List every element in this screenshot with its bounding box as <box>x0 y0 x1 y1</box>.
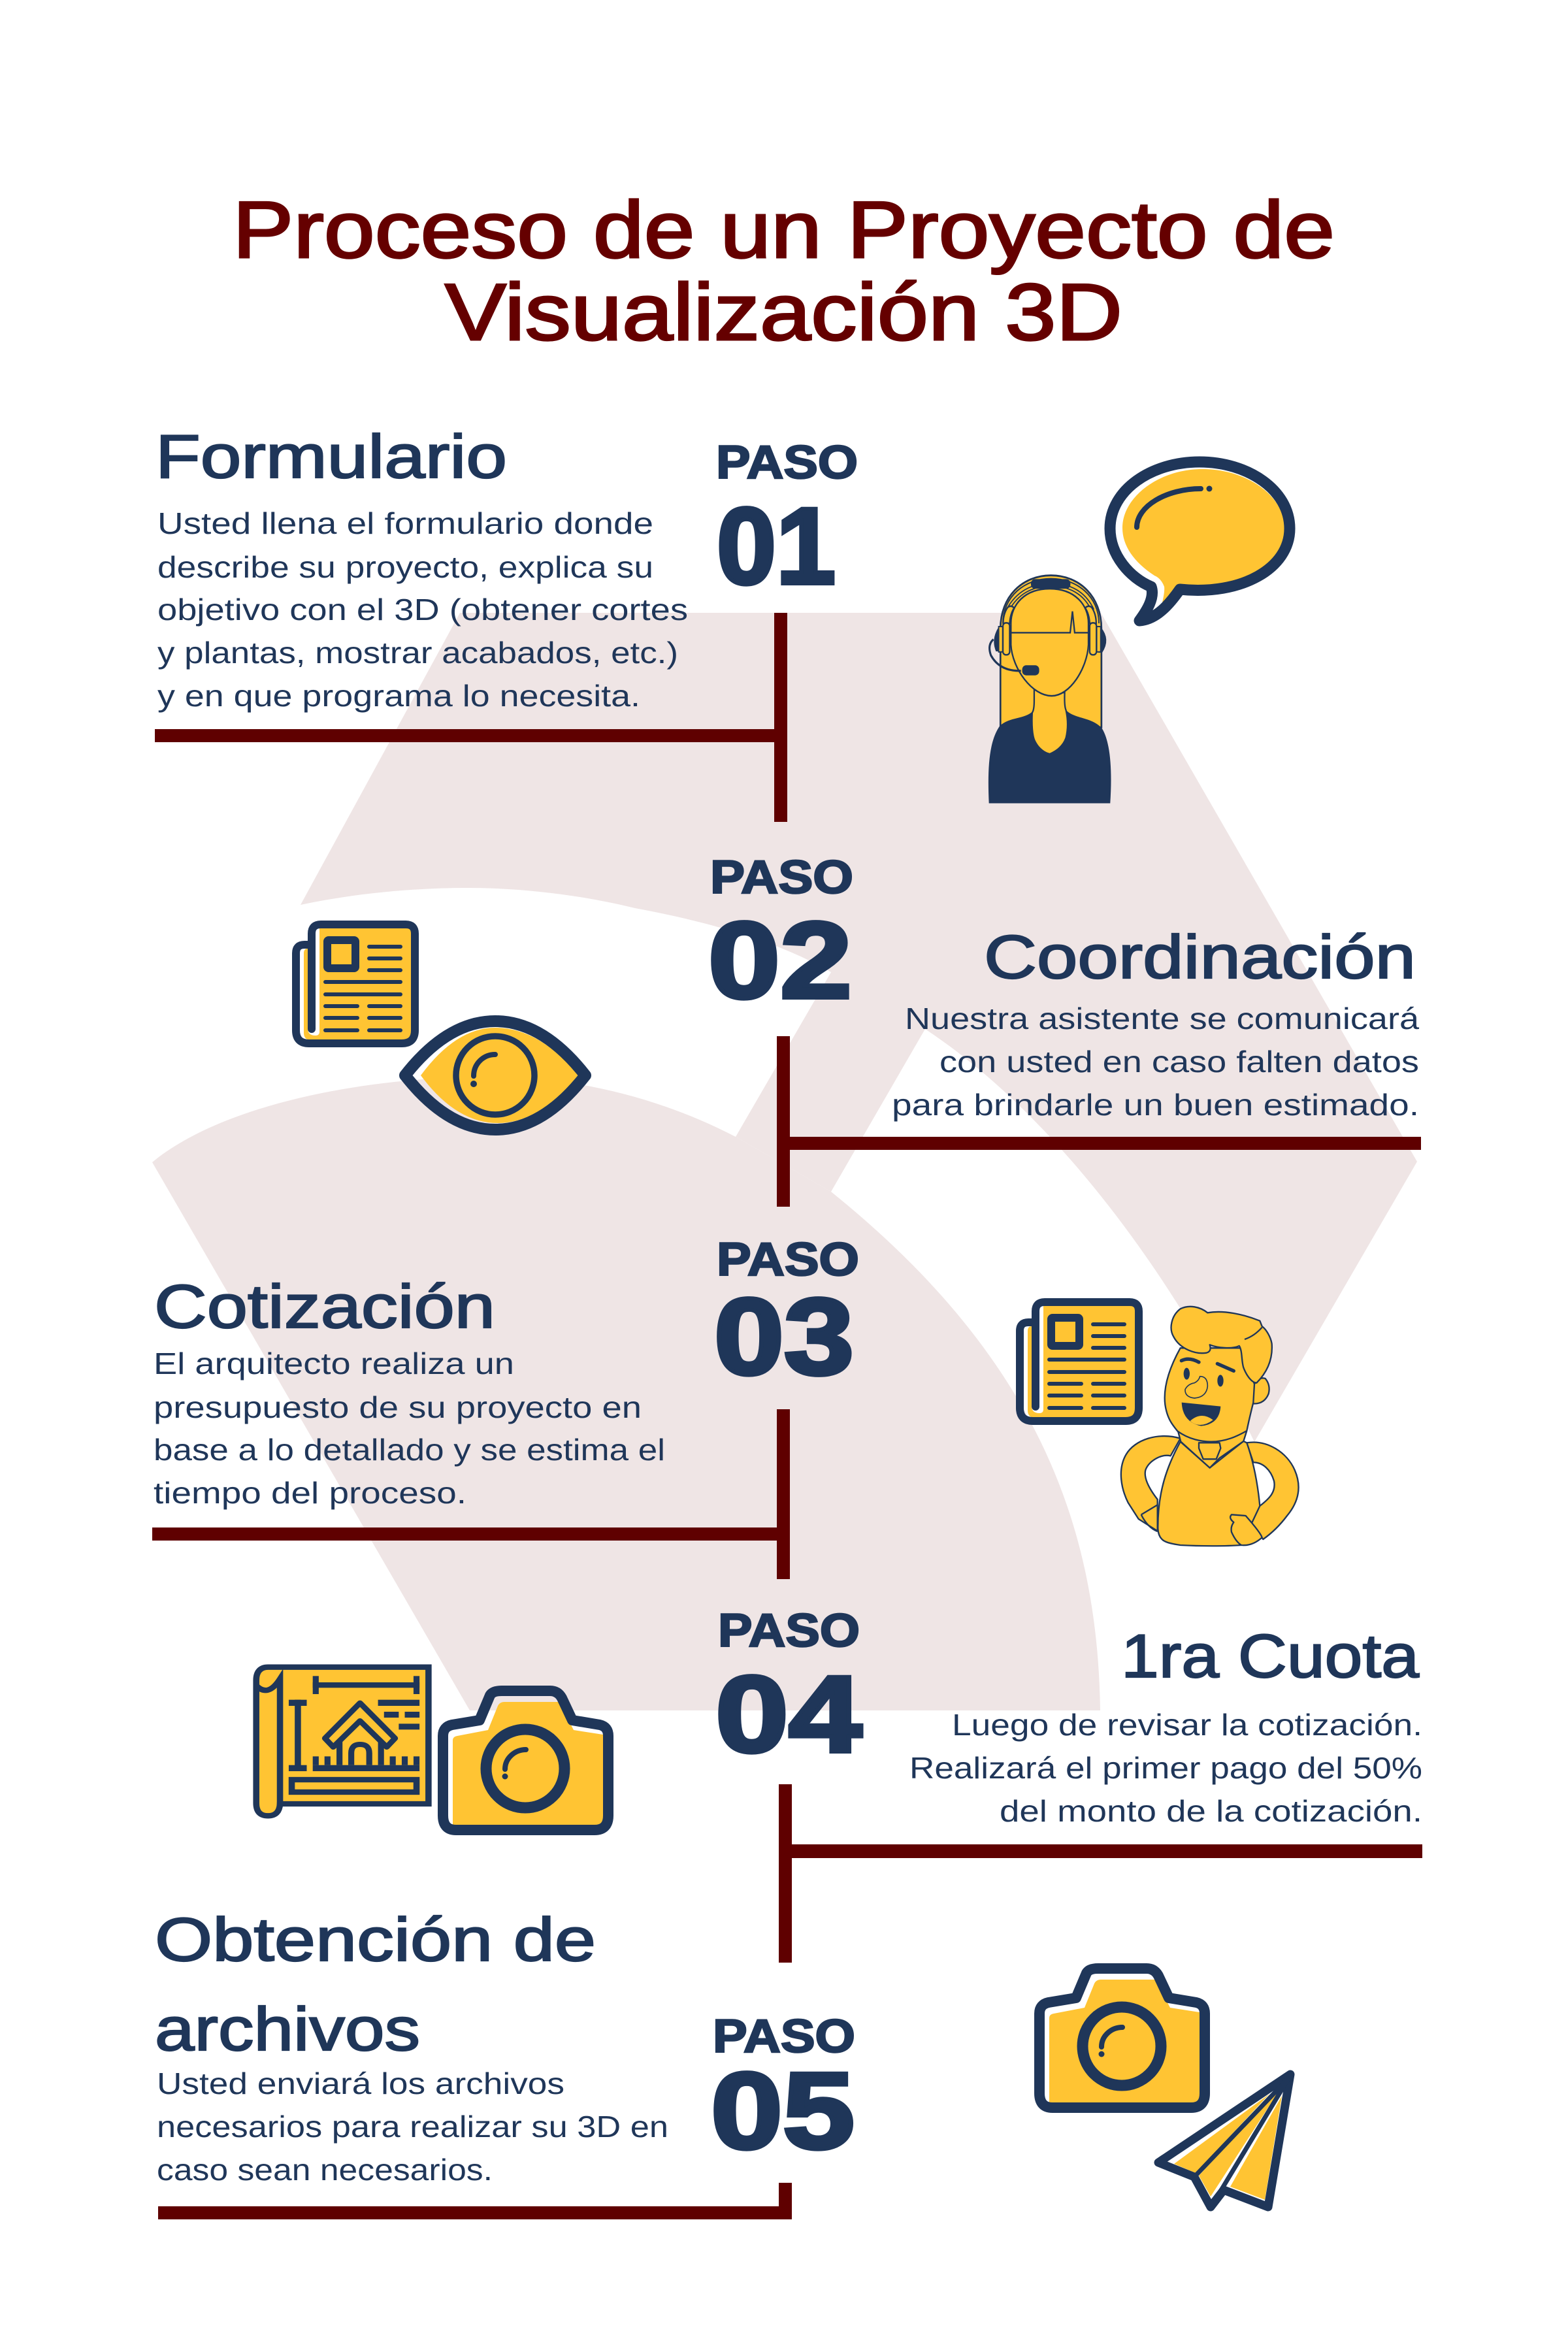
text block: cuota description: Realizará el primer pago del 50% <box>909 1751 1422 1785</box>
heading: Formulario: Formulario <box>155 422 507 491</box>
step label: PASO 02 <box>708 852 853 1021</box>
text block: formulario description: y en que programa lo necesita. <box>157 679 640 713</box>
icon: paper plane <box>1158 2074 1290 2207</box>
text block: cuota description: del monto de la cotización. <box>1000 1794 1422 1828</box>
step label: PASO 03: 03 <box>714 1277 854 1397</box>
step label: PASO 04: PASO <box>718 1605 860 1657</box>
icon: camera <box>443 1691 608 1830</box>
text block: cuota description: Luego de revisar la cotización. <box>952 1708 1422 1742</box>
text block: cuota description <box>909 1708 1422 1828</box>
heading: 1ra Cuota: 1ra Cuota <box>1121 1622 1420 1690</box>
icon: smiling man <box>1121 1307 1299 1546</box>
heading: Obtención de archivos: archivos <box>155 1995 420 2063</box>
heading: Obtención de archivos: Obtención de <box>155 1905 596 1974</box>
step label: PASO 03 <box>714 1234 859 1397</box>
step label: PASO 02: 02 <box>708 900 852 1021</box>
text block: formulario description: Usted llena el formulario donde <box>157 506 653 540</box>
background: recycling arrows shape <box>152 613 1417 1710</box>
connector: step 1 <box>155 613 787 822</box>
icon: newspaper <box>1020 1302 1139 1421</box>
text block: archivos description <box>157 2066 668 2187</box>
connector: step 3 <box>152 1409 790 1579</box>
step label: PASO 02: PASO <box>710 852 853 904</box>
connector: step 4 <box>779 1784 1422 1963</box>
panel: step 3 cotizacion <box>152 1234 1299 1579</box>
icon: speech bubble <box>1110 462 1290 621</box>
panel: step 2 coordinacion <box>296 852 1421 1207</box>
text block: cotizacion description: presupuesto de su proyecto en <box>154 1390 642 1424</box>
step label: PASO 01: 01 <box>717 486 836 607</box>
text block: coordinacion description: Nuestra asistente se comunicará <box>905 1002 1419 1036</box>
text block: coordinacion description: con usted en caso falten datos <box>939 1045 1419 1079</box>
step label: PASO 05: 05 <box>711 2051 855 2172</box>
icon: house blueprint <box>256 1667 429 1816</box>
title: Visualización 3D <box>445 268 1122 357</box>
title <box>233 186 1335 357</box>
step label: PASO 01 <box>716 437 858 607</box>
text block: coordinacion description <box>892 1002 1419 1122</box>
connector: step 5 <box>158 2183 792 2219</box>
text block: formulario description: y plantas, mostrar acabados, etc.) <box>157 636 678 670</box>
step label: PASO 05 <box>711 2011 855 2172</box>
heading: Cotización: Cotización <box>154 1272 495 1341</box>
text block: cotizacion description: El arquitecto realiza un <box>154 1347 514 1380</box>
icon: woman with headset <box>988 576 1111 804</box>
step label: PASO 04: 04 <box>715 1654 862 1775</box>
text block: formulario description: describe su proyecto, explica su <box>157 550 653 584</box>
title: Proceso de un Proyecto de <box>233 186 1335 275</box>
heading: Obtención de archivos <box>155 1905 596 2063</box>
text block: cotizacion description <box>154 1347 665 1510</box>
text block: cotizacion description: tiempo del proceso. <box>154 1476 466 1510</box>
step label: PASO 04 <box>715 1605 862 1775</box>
heading: Coordinación: Coordinación <box>984 923 1416 991</box>
icon: camera <box>1039 1968 1205 2108</box>
text block: archivos description: caso sean necesarios. <box>157 2153 493 2187</box>
panel: step 5 obtencion de archivos <box>155 1905 1290 2219</box>
text block: formulario description <box>157 506 688 713</box>
panel: step 1 formulario <box>155 422 1290 822</box>
step label: PASO 01: PASO <box>716 437 858 489</box>
text block: cotizacion description: base a lo detallado y se estima el <box>154 1433 665 1467</box>
text block: formulario description: objetivo con el 3D (obtener cortes <box>157 593 688 627</box>
icon: newspaper <box>296 924 415 1043</box>
step label: PASO 05: PASO <box>713 2011 855 2063</box>
icon: eye <box>405 1021 585 1130</box>
panel: step 4 primera cuota <box>256 1605 1422 1963</box>
text block: archivos description: necesarios para realizar su 3D en <box>157 2110 668 2144</box>
connector: step 2 <box>777 1036 1421 1207</box>
step label: PASO 03: PASO <box>717 1234 859 1286</box>
text block: archivos description: Usted enviará los archivos <box>157 2066 564 2100</box>
text block: coordinacion description: para brindarle un buen estimado. <box>892 1088 1419 1122</box>
